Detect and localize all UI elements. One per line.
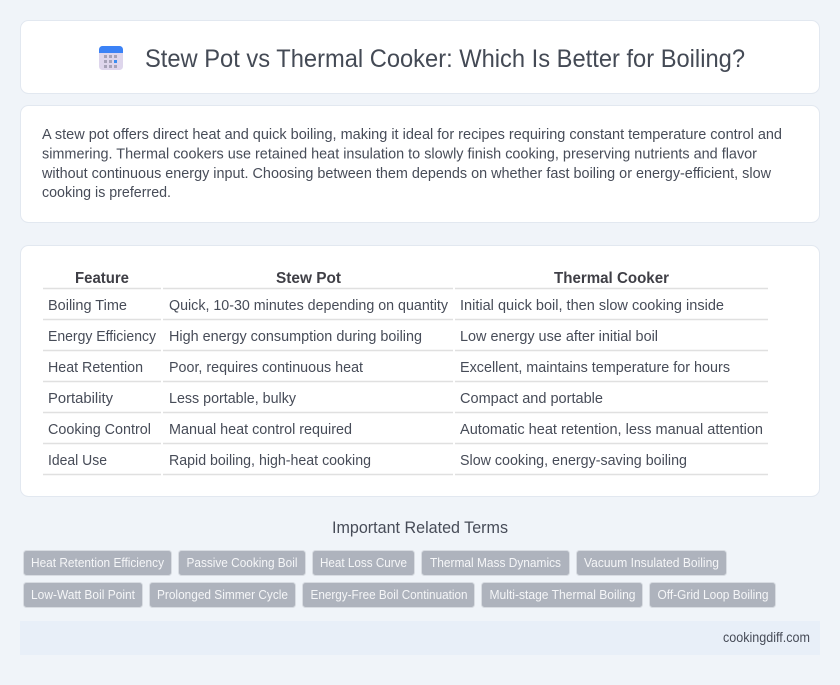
row: boiling time: Quick, 10-30 minutes depending on quantity [169, 298, 449, 314]
table header [75, 270, 669, 287]
row: cooking control: Cooking Control [48, 422, 151, 438]
tags: related terms: Low-Watt Boil Point [31, 588, 136, 602]
row: ideal use: Rapid boiling, high-heat cooking [169, 453, 371, 469]
tags: related terms: Thermal Mass Dynamics [430, 556, 561, 570]
row: energy efficiency [48, 329, 658, 345]
row: ideal use: Slow cooking, energy-saving boiling [460, 453, 687, 469]
text block: introduction: without continuous energy input. Choosing between them depends on whether fast boiling or energy-efficient, slow [41, 166, 772, 182]
tags: related terms: Heat Retention Efficiency [31, 556, 165, 570]
row: ideal use [48, 453, 687, 469]
text block: introduction [41, 127, 782, 201]
row: cooking control: Manual heat control required [169, 422, 352, 438]
row: boiling time [48, 298, 724, 314]
row: energy efficiency: Energy Efficiency [48, 329, 157, 345]
row: cooking control [48, 422, 763, 438]
row: portability [48, 391, 603, 407]
footer [20, 621, 820, 655]
row: heat retention: Poor, requires continuous heat [169, 360, 363, 376]
tags: related terms: Multi-stage Thermal Boiling [490, 588, 636, 602]
heading: related terms: Important Related Terms [332, 519, 508, 537]
tags: related terms: Prolonged Simmer Cycle [157, 588, 288, 602]
row: heat retention: Heat Retention [48, 360, 143, 376]
icon: calendar [99, 46, 123, 70]
tags: related terms: Passive Cooking Boil [186, 556, 298, 570]
panel: comparison table [20, 246, 820, 496]
row: cooking control: Automatic heat retention, less manual attention [460, 422, 763, 438]
tags: related terms: Energy-Free Boil Continuation [310, 588, 468, 602]
tags: related terms [24, 550, 776, 608]
panel: introduction [20, 106, 820, 222]
footer: cookingdiff.com [723, 630, 810, 645]
row: boiling time: Initial quick boil, then slow cooking inside [460, 298, 724, 314]
table header: Stew Pot [276, 270, 341, 287]
row: portability: Less portable, bulky [169, 391, 297, 407]
row: portability: Portability [48, 391, 114, 407]
table header: Feature [75, 270, 129, 287]
text block: introduction: A stew pot offers direct heat and quick boiling, making it ideal for recipes requiring constant temperature control and [42, 127, 782, 143]
tags: related terms: Heat Loss Curve [320, 556, 407, 570]
title: Stew Pot vs Thermal Cooker: Which Is Better for Boiling? [145, 45, 745, 73]
row: boiling time: Boiling Time [48, 298, 127, 314]
text block: introduction: simmering. Thermal cookers use retained heat insulation to slowly finish cooking, preserving nutrients and flavor [42, 146, 757, 162]
row: heat retention [48, 360, 730, 376]
tags: related terms: Vacuum Insulated Boiling [584, 556, 719, 570]
row: heat retention: Excellent, maintains temperature for hours [460, 360, 730, 376]
row: ideal use: Ideal Use [48, 453, 107, 469]
tags: related terms: Off-Grid Loop Boiling [658, 588, 769, 602]
row: energy efficiency: Low energy use after initial boil [460, 329, 658, 345]
text block: introduction: cooking is preferred. [42, 185, 171, 201]
row: portability: Compact and portable [460, 391, 603, 407]
row: energy efficiency: High energy consumption during boiling [169, 329, 422, 345]
panel: header [20, 20, 820, 94]
table header: Thermal Cooker [554, 270, 669, 287]
